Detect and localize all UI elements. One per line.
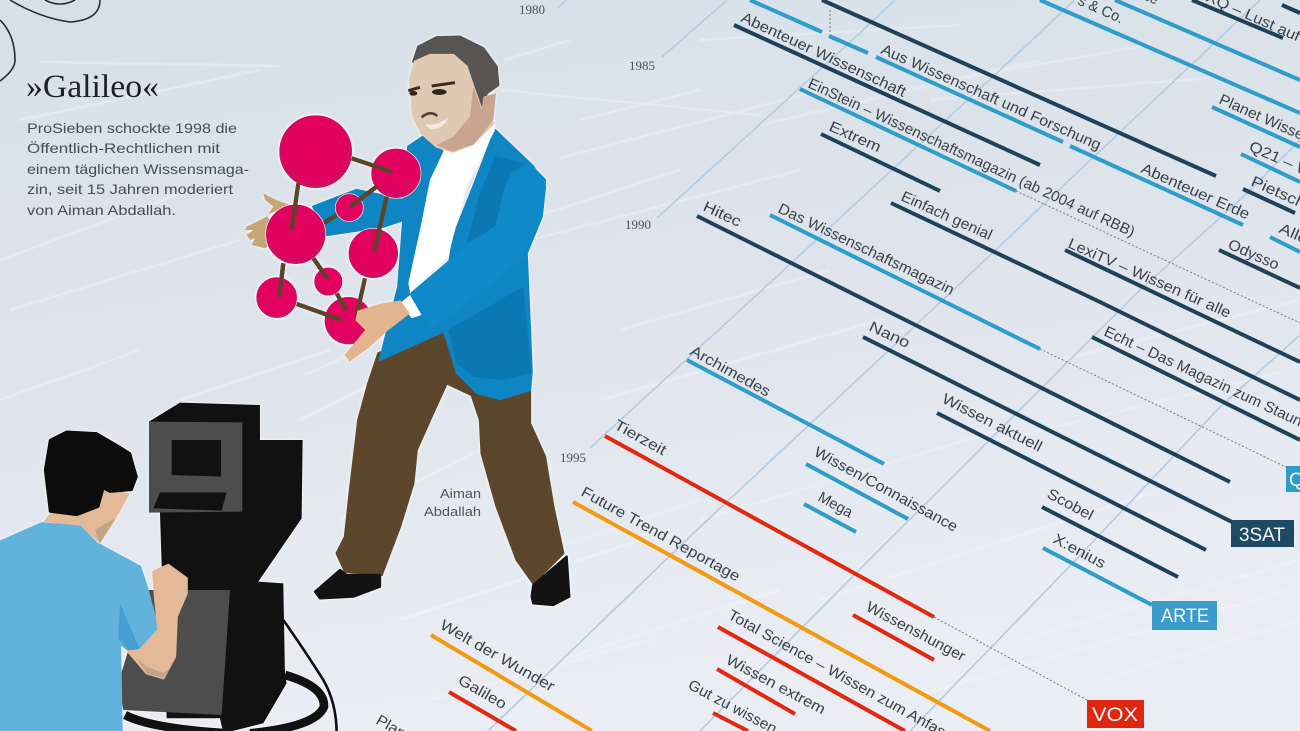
molecule spheres [256, 115, 421, 345]
programme: Abenteuer Erde: Abenteuer Erde [1138, 160, 1252, 223]
programme: LexiTV: LexiTV – Wissen für alle [1065, 235, 1233, 322]
programme: Archimedes [687, 343, 884, 464]
programme: Welt der Wunder: Welt der Wunder [437, 617, 557, 695]
programme: X:enius: X:enius [1050, 531, 1108, 572]
programme: Archimedes: Archimedes [687, 343, 773, 401]
caption: Aiman Abdallah [424, 486, 481, 519]
year labels: 1995 [560, 450, 586, 465]
channel tag: clipped blue [1286, 466, 1300, 492]
trousers and shoes [315, 327, 569, 605]
molecule rods behind [279, 187, 377, 297]
programme: Odysso [1219, 236, 1300, 288]
programme: Extrem [821, 118, 940, 191]
programme: unnamed blue top [750, 0, 868, 53]
programme timeline [373, 0, 1300, 731]
illustration: cameraman with TV camera [0, 403, 337, 731]
jacket right side [440, 130, 545, 399]
intro text block [27, 120, 249, 218]
programme: EinStein: EinStein – Wissenschaftsmagazin (ab 2004 auf RBB) [805, 75, 1137, 241]
channel tag: VOX: VOX [1092, 705, 1138, 726]
left hand [245, 193, 290, 248]
programme: Aus Wissenschaft und Forschung: Aus Wissenschaft und Forschung [878, 41, 1104, 154]
timeline grid lines [488, 0, 1300, 731]
programme: top right short [1282, 5, 1300, 13]
hair [413, 37, 498, 108]
torso and head [245, 37, 545, 399]
programme: Pietsch: Pietsch [1248, 173, 1300, 212]
dotted connectors [830, 10, 1300, 700]
intro text block: ProSieben schockte 1998 die [27, 120, 237, 136]
camera panel [118, 590, 230, 715]
programme: Galileo: Galileo [455, 672, 509, 713]
programme: Abenteuer Wissenschaft [734, 9, 1040, 165]
programme: Future Trend Reportage [573, 484, 990, 731]
channel tag: ARTE [1152, 601, 1217, 630]
programme: Nano: Nano [866, 318, 912, 352]
programme: Extrem: Extrem [826, 118, 884, 156]
programme: & Co. [1040, 0, 1300, 113]
programme: Galileo [449, 672, 516, 731]
hair [45, 432, 137, 515]
programme: Wissen extrem: Wissen extrem [723, 652, 828, 718]
programme: Scobel [1042, 486, 1178, 577]
programme: Odysso: Odysso [1225, 236, 1282, 274]
programme: Alle [1270, 220, 1300, 252]
cable scribble top left [0, 0, 100, 81]
intro text block: Öffentlich-Rechtlichen mit [27, 139, 220, 156]
title: »Galileo« [26, 69, 159, 105]
camera body [149, 403, 303, 731]
intro text block: einem täglichen Wissensmaga- [27, 161, 249, 177]
right hand and cuff [400, 295, 422, 318]
arm [128, 565, 187, 678]
programme: Mega: Mega [815, 489, 856, 522]
programme: Welt der Wunder [431, 617, 592, 731]
camera cable ring [125, 675, 324, 731]
programme: Wissen aktuell: Wissen aktuell [939, 390, 1045, 456]
shirt [0, 523, 158, 731]
programme: Hitec: Hitec [700, 198, 744, 231]
programme: Aus Wissenschaft und Forschung [876, 41, 1243, 225]
programme: Scobel: Scobel [1044, 486, 1096, 524]
year labels [519, 2, 655, 465]
face [410, 55, 493, 152]
caption: Aiman Abdallah: Abdallah [424, 504, 481, 519]
programme: Wissenshunger: Wissenshunger [863, 599, 968, 665]
programme: Mega [804, 489, 856, 532]
caption: Aiman Abdallah: Aiman [440, 486, 481, 501]
year labels: 1990 [625, 217, 651, 232]
programme: Tierzeit [605, 417, 934, 617]
programme: Wissen aktuell [937, 390, 1206, 550]
programme: X:enius [1043, 531, 1152, 605]
channel tag: ARTE: ARTE [1161, 606, 1209, 627]
programme: Tierzeit: Tierzeit [611, 417, 670, 460]
programme: Einfach genial: Einfach genial [898, 188, 995, 244]
programme: Das Wissenschaftsmagazin: Das Wissenschaftsmagazin [775, 200, 957, 299]
programme: LexiTV [1065, 235, 1300, 362]
channel tag: 3SAT [1231, 520, 1294, 547]
white shirt [408, 118, 495, 292]
figure: Aiman Abdallah with molecule [245, 37, 569, 605]
programme: Abenteuer Wissenschaft: Abenteuer Wissenschaft [738, 9, 909, 101]
programme: Nano [863, 318, 1232, 522]
molecule rods front [279, 158, 392, 320]
programme: top blue [1115, 0, 1300, 80]
viewfinder [149, 422, 242, 513]
intro text block: zin, seit 15 Jahren moderiert [27, 181, 233, 197]
year labels: 1985 [629, 58, 655, 73]
jacket left side and sleeve [313, 137, 447, 360]
channel tag: VOX [1087, 700, 1144, 728]
programme: Hitec [697, 198, 1230, 482]
programme: unnamed dark top [822, 0, 1216, 176]
programme: Einfach genial [891, 188, 1300, 400]
channel tag: 3SAT: 3SAT [1239, 525, 1285, 546]
programme: Das Wissenschaftsmagazin [770, 200, 1040, 349]
year labels: 1980 [519, 2, 545, 17]
programme: Wissen/Connaissance: Wissen/Connaissance [811, 444, 961, 536]
programme: Future Trend Reportage: Future Trend Reportage [578, 484, 743, 585]
intro text block: von Aiman Abdallah. [27, 202, 176, 218]
neck [43, 488, 130, 543]
